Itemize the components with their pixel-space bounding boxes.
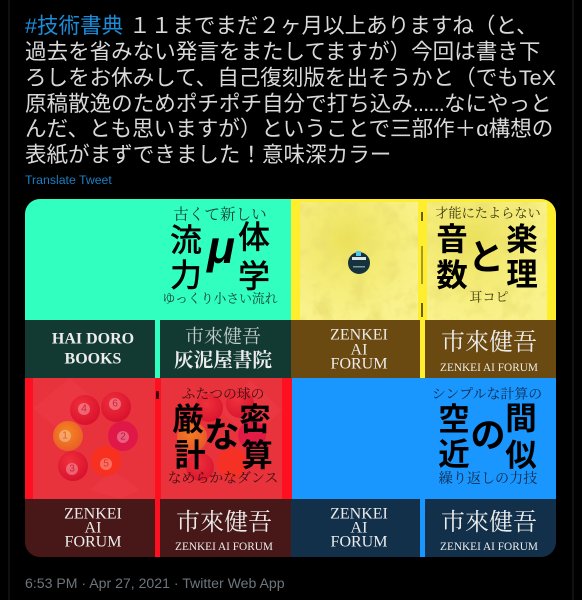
tweet text: 過去を省みない発言をまたしてますが）今回は書き下	[25, 39, 540, 64]
footer: front cover author: ZENKEI AI FORUM	[440, 541, 538, 553]
heading: strict calculation: 算	[241, 437, 273, 473]
billiard balls: back cover: 4	[81, 404, 87, 414]
billiard balls: back cover: 6	[112, 398, 118, 410]
heading: fluid mechanics: 学	[238, 258, 270, 294]
heading: fluid mechanics: ゆっくり小さい流れ	[162, 291, 278, 306]
text line 1 with hashtag: #技術書典 １１までまだ２ヶ月以上ありますね（と、	[25, 13, 538, 38]
footer: author and press: 市來健吾	[185, 326, 261, 348]
spine footer	[420, 499, 425, 557]
heading: fluid mechanics: 古くて新しい	[173, 206, 267, 224]
heading: spatial approximation: シンプルな計算の	[432, 386, 542, 402]
heading: spatial approximation: 間	[505, 400, 537, 436]
footer: publisher: HAI DORO	[52, 330, 134, 348]
heading: music and math: 音	[436, 221, 468, 257]
footer: back cover publisher	[291, 320, 420, 378]
billiard balls: back cover: 5	[103, 458, 109, 470]
icon: round badge	[348, 251, 370, 274]
tweet text: ろしをお休みして、自己復刻版を出そうかと（でもTeX	[25, 65, 556, 90]
heading: spatial approximation: 近	[438, 436, 470, 472]
front cover texture	[427, 202, 547, 320]
footer: front cover author: 市來健吾	[441, 329, 537, 356]
heading: strict calculation: ふたつの球の	[182, 386, 264, 402]
footer: back cover publisher: FORUM	[331, 356, 387, 372]
heading: music and math: と	[468, 236, 504, 278]
spine footer	[420, 320, 425, 378]
billiard balls: back cover: 3	[69, 464, 75, 474]
heading: music and math	[435, 204, 541, 304]
footer: publisher	[25, 320, 155, 378]
heading: music and math: 才能にたよらない	[435, 204, 541, 220]
billiard balls: back cover: 2	[120, 432, 126, 442]
cover image grid	[25, 199, 556, 557]
tweet text: 表紙がまずできました！意味深カラー	[25, 142, 391, 167]
heading: strict calculation: 密	[239, 401, 271, 437]
heading: spatial approximation	[432, 386, 542, 487]
heading: spatial approximation: 空	[438, 401, 470, 437]
footer: author and press: 灰泥屋書院	[174, 348, 272, 372]
billiard balls: back cover: 1	[62, 430, 68, 442]
footer: back cover publisher: AI	[351, 520, 367, 536]
heading: strict calculation: 厳	[172, 401, 204, 437]
footer: front cover author	[160, 499, 291, 557]
panel: spatial approximation cover	[290, 378, 556, 557]
panel: strict calculation cover	[25, 378, 291, 557]
footer: front cover author: ZENKEI AI FORUM	[175, 541, 273, 553]
footer: author and press	[160, 320, 291, 378]
heading: fluid mechanics: 力	[170, 257, 202, 293]
tweet text: んだ、とも思いますが）ということで三部作＋α構想の	[25, 116, 553, 141]
tweet text	[25, 13, 556, 167]
footer: back cover publisher: FORUM	[65, 534, 121, 550]
translate link: Translate Tweet	[25, 173, 112, 187]
billiard balls: back cover	[53, 392, 138, 481]
heading: spatial approximation: の	[470, 416, 506, 456]
heading: fluid mechanics: 体	[238, 219, 270, 255]
footer: back cover publisher: ZENKEI	[330, 326, 388, 344]
heading: strict calculation	[168, 386, 278, 486]
footer: back cover publisher: ZENKEI	[330, 506, 388, 522]
heading: music and math: 耳コピ	[469, 290, 509, 304]
heading: fluid mechanics	[162, 206, 278, 306]
panel: fluid mechanics cover	[25, 199, 291, 378]
footer: back cover publisher	[291, 499, 420, 557]
heading: strict calculation: なめらかなダンス	[168, 470, 278, 486]
billiard balls: front cover	[177, 390, 266, 481]
heading: strict calculation: な	[204, 416, 240, 456]
footer: front cover author	[425, 499, 556, 557]
heading: music and math: 数	[436, 257, 468, 293]
heading: music and math: 理	[506, 256, 538, 292]
spine footer	[155, 499, 160, 557]
heading: fluid mechanics: μ	[205, 221, 235, 273]
panel: music and math cover	[290, 199, 556, 378]
footer: publisher: BOOKS	[65, 350, 122, 368]
footer: back cover publisher: ZENKEI	[64, 506, 122, 522]
footer: back cover publisher: AI	[85, 520, 101, 536]
heading: spatial approximation: 似	[505, 437, 537, 473]
heading: strict calculation: 計	[174, 437, 206, 473]
footer: front cover author: ZENKEI AI FORUM	[440, 362, 538, 374]
footer: front cover author: 市來健吾	[441, 509, 537, 536]
heading: spatial approximation: 繰り返しの力技	[439, 470, 537, 487]
back cover texture	[300, 202, 418, 320]
heading: music and math: 楽	[506, 221, 538, 257]
spine	[421, 212, 423, 317]
timestamp: 6:53 PM · Apr 27, 2021 · Twitter Web App	[25, 575, 285, 591]
tweet text: 原稿散逸のためポチポチ自分で打ち込み......なにやっと	[25, 91, 552, 116]
footer: front cover author: 市來健吾	[176, 509, 272, 536]
heading: fluid mechanics: 流	[170, 222, 202, 258]
footer: back cover publisher	[25, 499, 155, 557]
footer: back cover publisher: FORUM	[331, 534, 387, 550]
footer: back cover publisher: AI	[351, 342, 367, 358]
footer: front cover author	[425, 320, 556, 378]
